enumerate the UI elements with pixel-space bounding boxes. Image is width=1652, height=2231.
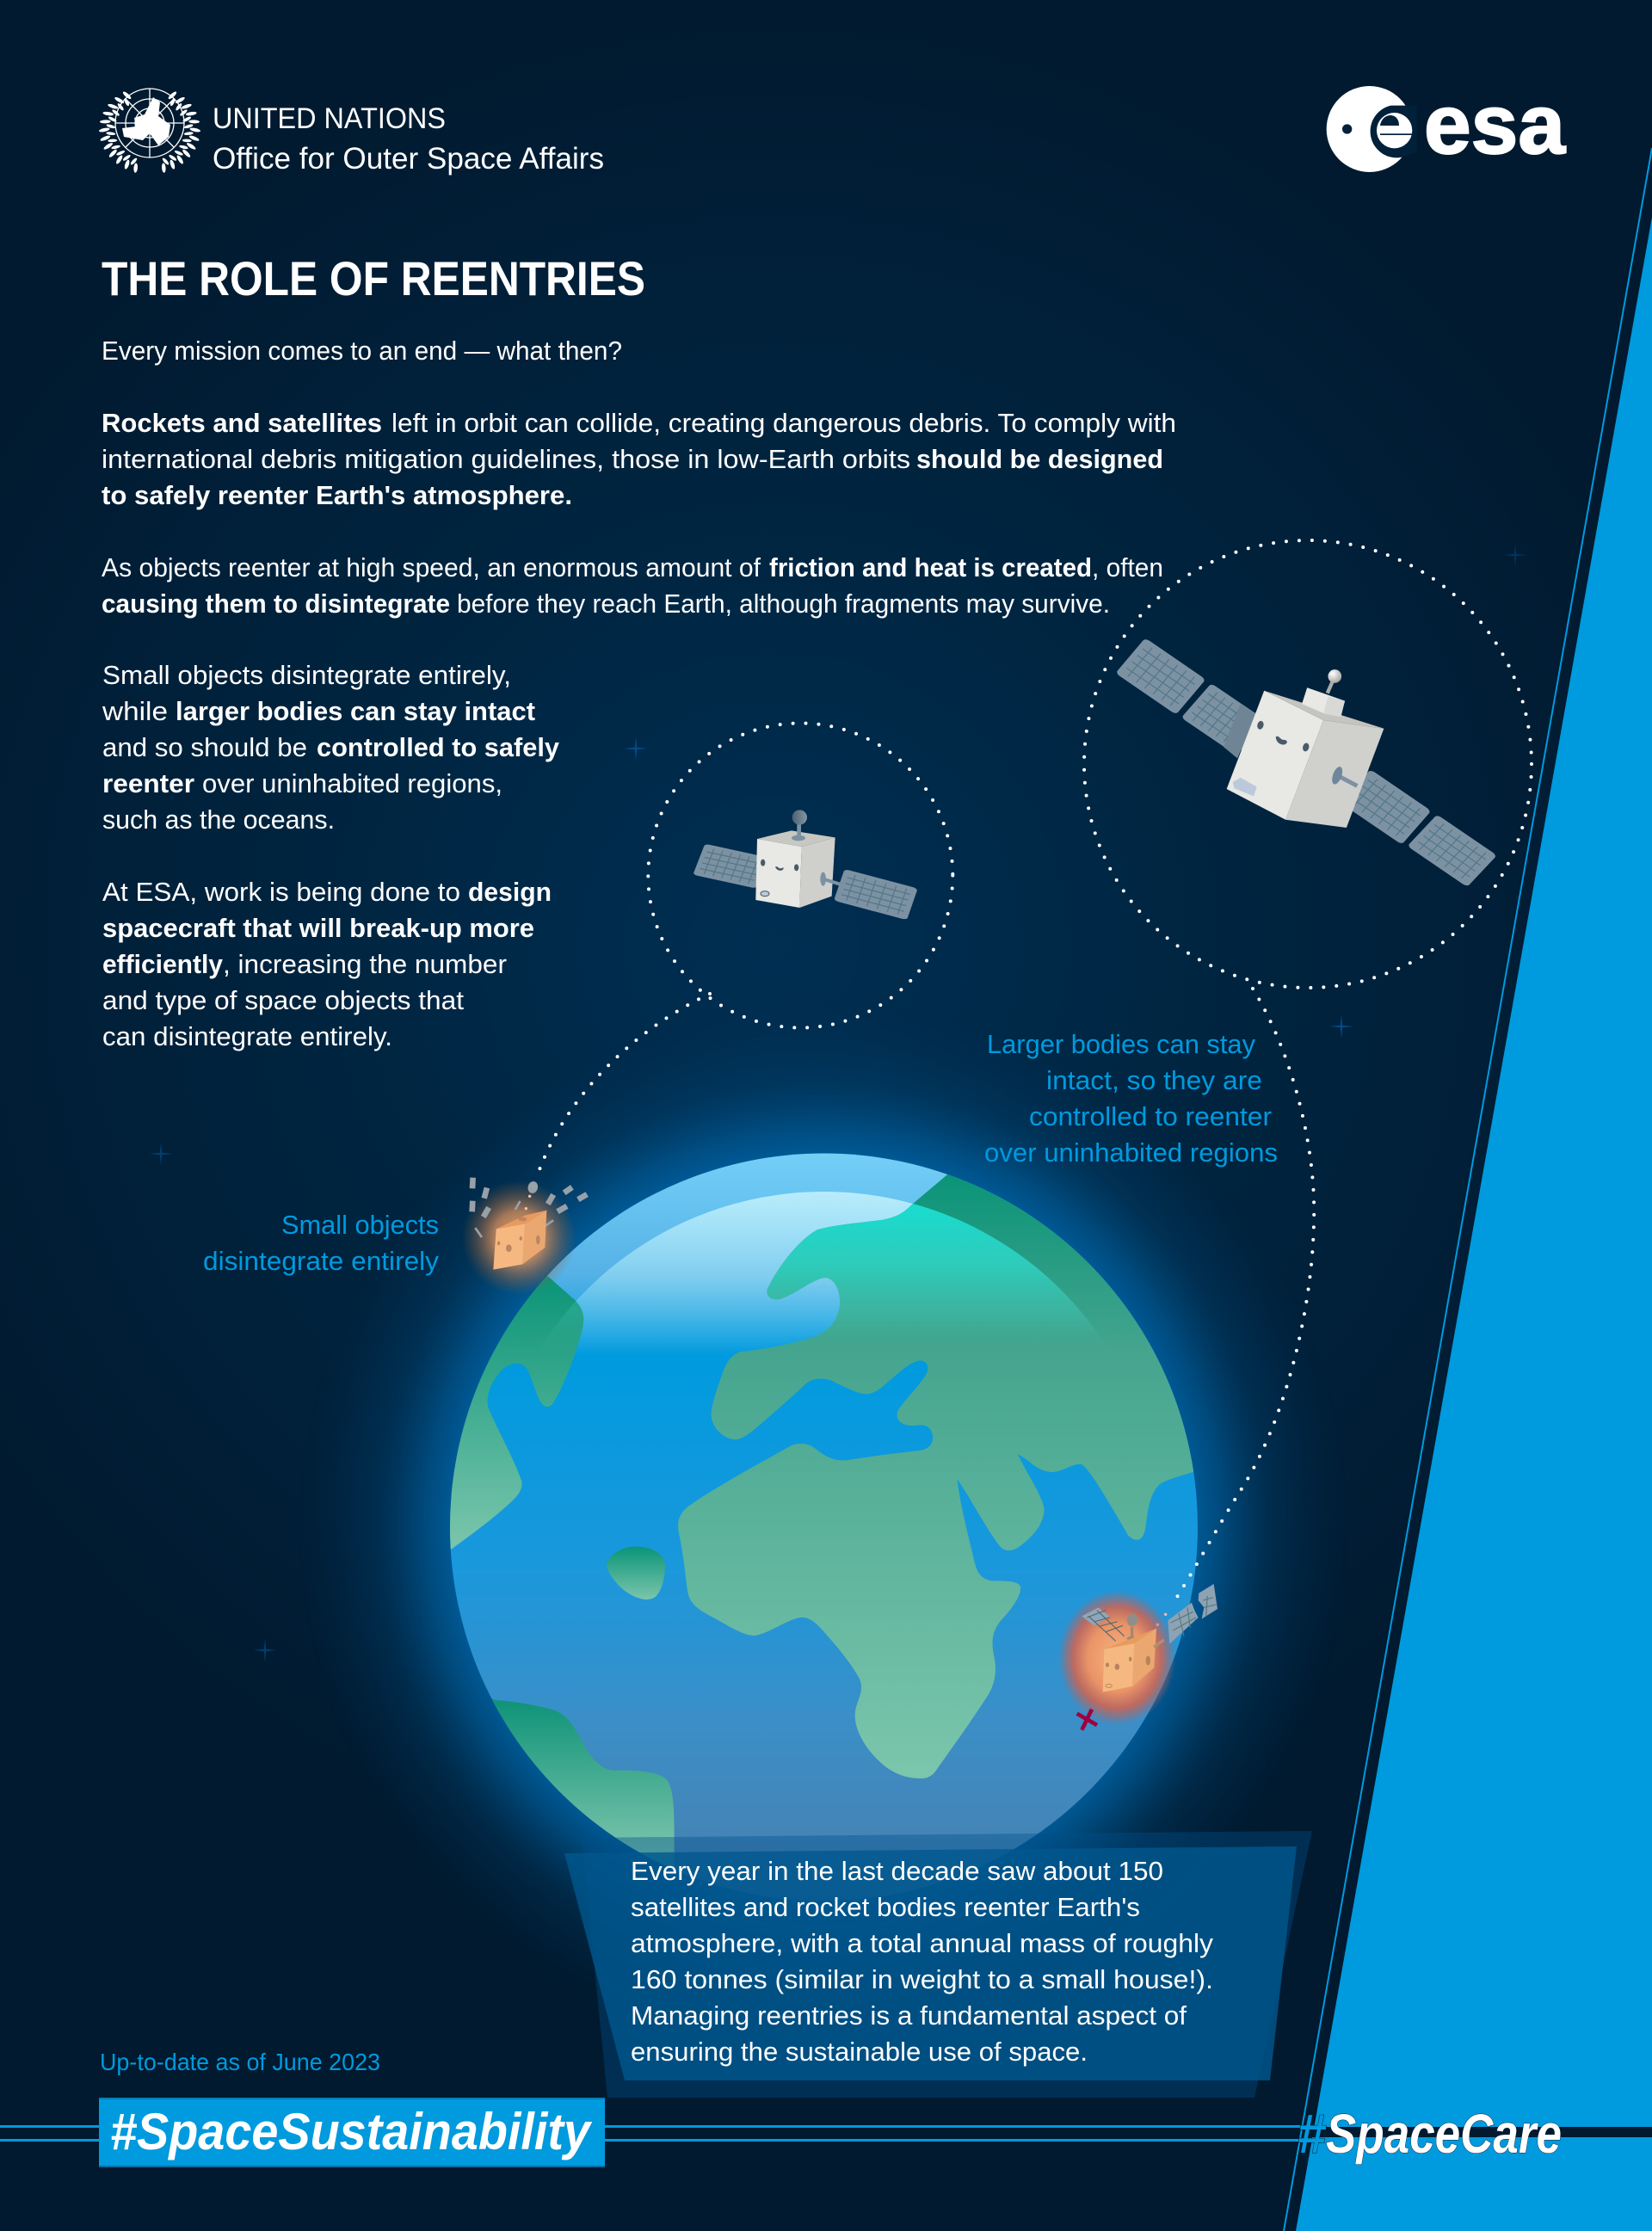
text block: small and large objects: larger bodies can stay intact [176,696,535,726]
land masses [450,1174,1194,1853]
text block: friction and heat [102,552,1163,619]
text: UN office name: UNITED NATIONS [213,102,446,135]
text block: friction and heat: As objects reenter at high speed, an enormous amount of [102,552,761,582]
callout text [631,1856,1213,2067]
label: larger bodies: Larger bodies can stay [987,1029,1255,1059]
text block: rockets and satellites: should be designed [916,444,1163,474]
hashtag: SpaceCare: # [1298,2103,1326,2165]
callout text: 160 tonnes (similar in weight to a small house!). [631,1964,1213,1994]
icon: large satellite [1115,638,1497,887]
dotted orbit: large satellite [1084,540,1532,988]
label: larger bodies [984,1029,1278,1168]
text block: ESA design work: efficiently [102,949,224,979]
dotted orbit: small satellite [648,723,952,1027]
text block: ESA design work [102,877,552,1051]
logo: esa [1327,77,1566,172]
date note: Up-to-date as of June 2023 [100,2049,380,2075]
text block: rockets and satellites: to safely reenter Earth's atmosphere. [102,480,572,510]
text block: friction and heat: causing them to disintegrate [102,589,450,619]
text block: ESA design work: At ESA, work is being done to [102,877,460,907]
label: small objects: Small objects [281,1210,439,1240]
hashtag: SpaceCare: SpaceCare [1326,2103,1562,2165]
text block: rockets and satellites: Rockets and satellites [102,408,382,438]
label: larger bodies: intact, so they are [1046,1065,1262,1095]
text block: ESA design work: and type of space objects that [102,985,464,1015]
logo: United Nations Office for Outer Space Affairs [98,89,604,176]
text block: small and large objects: reenter [102,768,194,798]
text block: ESA design work: design [468,877,552,907]
stars [149,543,1527,1662]
text block: rockets and satellites: left in orbit can collide, creating dangerous debris. To comply with [391,408,1176,438]
right blue wedge [1284,148,1652,2231]
text block: ESA design work: , increasing the number [223,949,507,979]
text block: ESA design work: can disintegrate entirely. [102,1021,392,1051]
text block: small and large objects: and so should be [102,732,307,762]
icon: UN emblem [98,89,201,173]
hashtag: SpaceSustainability: #SpaceSustainability [110,2103,592,2160]
text block: rockets and satellites [102,408,1176,510]
text block: small and large objects: while [102,696,168,726]
text: UN office name [213,102,604,176]
icon: red cross impact marker [1077,1710,1097,1730]
text block: introduction: Every mission comes to an end — what then? [102,336,622,366]
label: small objects: disintegrate entirely [203,1246,439,1276]
text block: friction and heat: before they reach Earth, although fragments may survive. [457,589,1110,619]
dotted path: small satellite to debris [539,994,710,1172]
callout text: Every year in the last decade saw about 150 [631,1856,1163,1886]
callout text: atmosphere, with a total annual mass of roughly [631,1928,1213,1958]
logo: esa: esa [1424,77,1566,171]
callout text: satellites and rocket bodies reenter Earth's [631,1892,1140,1922]
text block: friction and heat: , often [1092,552,1163,582]
text block: friction and heat: friction and heat is created [769,552,1092,582]
dotted path: large satellite to reentry [1173,989,1314,1604]
callout text: Managing reentries is a fundamental aspect of [631,2000,1187,2031]
label: larger bodies: controlled to reenter [1029,1101,1272,1131]
label: small objects [203,1210,439,1276]
globe [450,1153,1198,1869]
title: THE ROLE OF REENTRIES [102,251,645,305]
text: UN office name: Office for Outer Space Affairs [213,142,604,176]
text block: small and large objects [102,660,560,835]
text block: rockets and satellites: international debris mitigation guidelines, those in low-Earth orbits [102,444,910,474]
icon: large object reentering [1058,1584,1217,1730]
horizontal lines [0,2125,1652,2142]
callout panel [564,1831,1312,2098]
text block: small and large objects: such as the oceans. [102,804,335,835]
text block: small and large objects: controlled to safely [317,732,560,762]
text block: ESA design work: spacecraft that will break-up more [102,913,534,943]
label: larger bodies: over uninhabited regions [984,1137,1278,1168]
globe halo [299,1002,1348,2052]
icon: small object disintegrating [462,1177,589,1295]
icon: small satellite [693,810,918,920]
text block: small and large objects: over uninhabited regions, [202,768,502,798]
callout text: ensuring the sustainable use of space. [631,2037,1088,2067]
text block: small and large objects: Small objects disintegrate entirely, [102,660,511,690]
